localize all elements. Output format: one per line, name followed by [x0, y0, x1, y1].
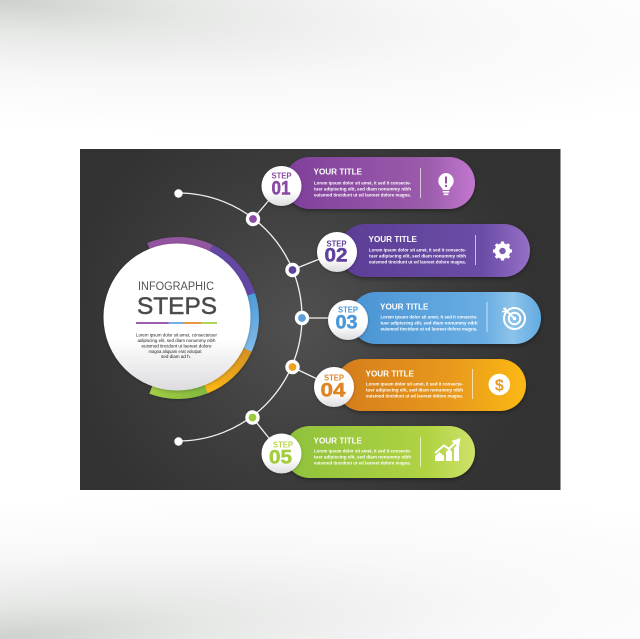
panel: step 1 — [262, 157, 475, 209]
step 2 title: YOUR TITLE — [368, 234, 417, 244]
step 1 badge: 01 — [272, 178, 291, 200]
step 3 badge — [328, 300, 368, 340]
step 5 text: Lorem ipsum dolor sit amet, it sed it consecte- — [314, 448, 412, 454]
step 3 text — [380, 314, 478, 332]
step 2 badge: 02 — [324, 245, 348, 267]
step 4 badge: STEP — [324, 373, 344, 383]
step 5 badge: STEP — [273, 440, 293, 450]
panel: step 4 — [314, 359, 526, 411]
step 2 text: euismod tincidunt ut ed laoreet dolore magna. — [369, 260, 466, 264]
step 5 text — [314, 448, 412, 466]
heading: infographic: INFOGRAPHIC — [138, 281, 214, 293]
node 4 — [285, 360, 300, 374]
step 1 badge — [262, 166, 302, 206]
step 1 text: Lorem ipsum dolor sit amet, it sed it consecte- — [314, 180, 412, 186]
node 3 — [295, 311, 309, 325]
step 4 text: tuer adipiscing elit, sed diam nonummy nibh — [366, 388, 463, 392]
step 3 badge: STEP — [338, 305, 358, 315]
step 2 text: Lorem ipsum dolor sit amet, it sed it consecte- — [369, 248, 467, 252]
icon: target — [502, 308, 525, 329]
panel: step 3 — [328, 292, 541, 344]
node 1 — [246, 212, 260, 226]
panel: step 2 — [317, 224, 530, 277]
segmented ring — [149, 241, 254, 395]
step 4 text: euismod tincidunt ut ed laoreet dolore magna. — [366, 394, 463, 398]
description text: sed diam ad h. — [161, 354, 191, 359]
step 2 badge: STEP — [326, 238, 347, 248]
description text: Lorem ipsum dolor sit amet, consectetuer — [136, 332, 217, 338]
step 4 text: Lorem ipsum dolor sit amet, it sed it consecte- — [366, 382, 464, 386]
description text: magna aliquam erat volutpat — [148, 349, 202, 354]
step 5 badge: 05 — [269, 446, 292, 468]
description text: adipiscing elit, sed diam nonummy nibh — [138, 338, 216, 343]
center circle — [104, 244, 250, 390]
dark panel — [80, 149, 560, 490]
icon: growth chart — [435, 438, 460, 461]
icon: dollar coin — [488, 374, 510, 395]
step 3 badge: 03 — [336, 312, 358, 334]
step 5 text: tuer adipiscing elit, sed diam nonummy nibh — [314, 454, 411, 460]
panel: step 5 — [262, 426, 475, 478]
description text: euismod tincidunt ut laoreet dolore — [142, 344, 212, 348]
step 1 text: tuer adipiscing elit, sed diam nonummy nibh — [314, 186, 411, 192]
step 2 text — [369, 248, 467, 264]
arc end dot top — [174, 189, 183, 198]
icon: dollar coin: $ — [495, 377, 504, 394]
step 2 badge — [317, 232, 357, 272]
heading: steps: STEPS — [137, 293, 217, 320]
step 1 text — [314, 180, 412, 198]
colour rule — [136, 322, 217, 324]
step 4 text — [366, 382, 464, 398]
step 5 title: YOUR TITLE — [314, 436, 362, 446]
step 5 badge — [262, 434, 302, 474]
arc end dot bottom — [174, 437, 183, 446]
step 1 title: YOUR TITLE — [314, 166, 362, 176]
connector arc — [178, 186, 348, 453]
node 2 — [285, 263, 300, 277]
step 3 text: tuer adipiscing elit, sed diam nonummy nibh — [380, 320, 478, 326]
node 5 — [245, 410, 260, 425]
step 5 text: euismod tincidunt ut ed laoreet dolore magna. — [314, 460, 411, 466]
step 4 badge — [314, 367, 354, 407]
step 1 badge: STEP — [272, 170, 292, 180]
step 4 title: YOUR TITLE — [366, 368, 414, 378]
step 3 text: euismod tincidunt ut ed laoreet dolore magna. — [380, 326, 478, 332]
icon: gear — [493, 242, 512, 260]
step 3 text: Lorem ipsum dolor sit amet, it sed it consecte- — [380, 314, 478, 320]
icon: light bulb — [438, 173, 454, 195]
step 4 badge: 04 — [320, 380, 346, 402]
step 3 title: YOUR TITLE — [380, 302, 429, 312]
step 2 text: tuer adipiscing elit, sed diam nonummy nibh — [369, 254, 466, 258]
step 1 text: euismod tincidunt ut ed laoreet dolore magna. — [314, 192, 411, 198]
description text — [136, 332, 217, 359]
